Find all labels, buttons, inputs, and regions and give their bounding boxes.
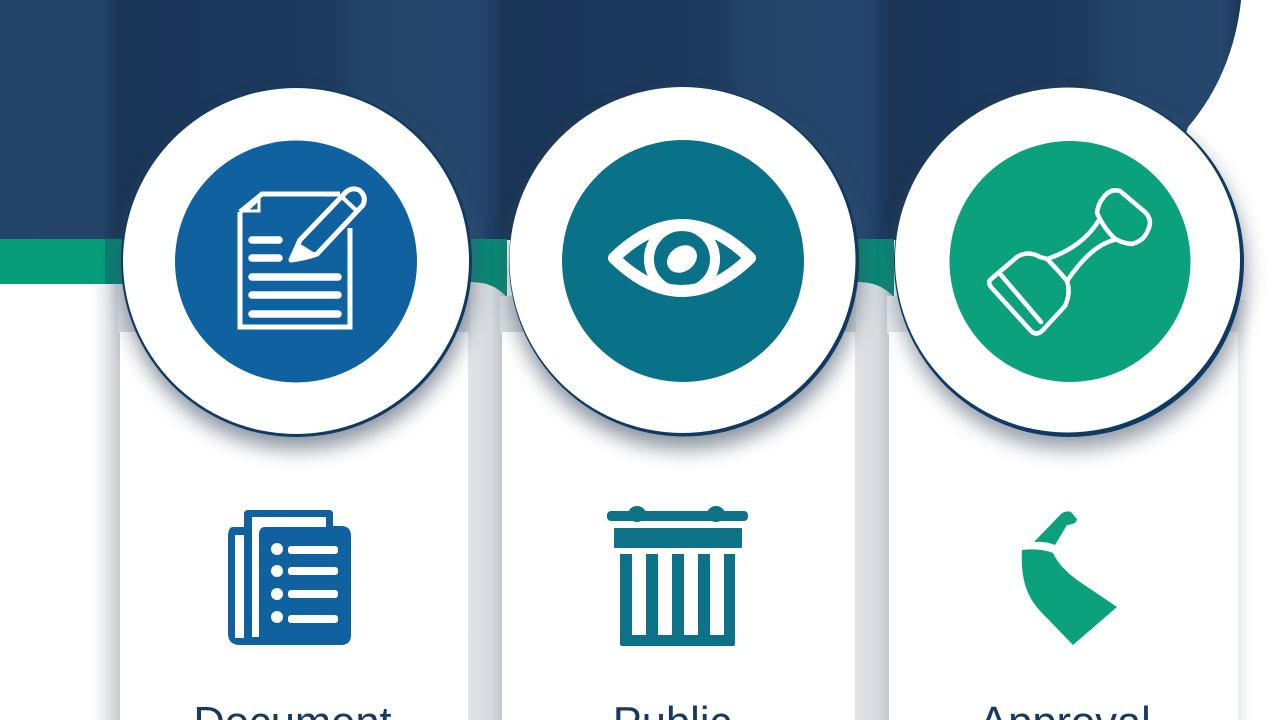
panel: card public (502, 332, 855, 720)
icon: files list (228, 510, 351, 645)
icon: stamp (989, 190, 1150, 334)
icon: eye (614, 225, 750, 292)
badge: approval (894, 87, 1246, 449)
badge: document (121, 86, 473, 449)
icon: temple bin (607, 506, 748, 646)
badge: public (509, 86, 860, 449)
gutters between cards (90, 282, 1252, 720)
header band (0, 0, 1241, 240)
panel: card approval (889, 332, 1238, 720)
panel: card document (120, 332, 468, 720)
green ribbon (0, 239, 894, 297)
icon: document with pencil (240, 189, 364, 327)
icon: green brush (1022, 511, 1117, 645)
